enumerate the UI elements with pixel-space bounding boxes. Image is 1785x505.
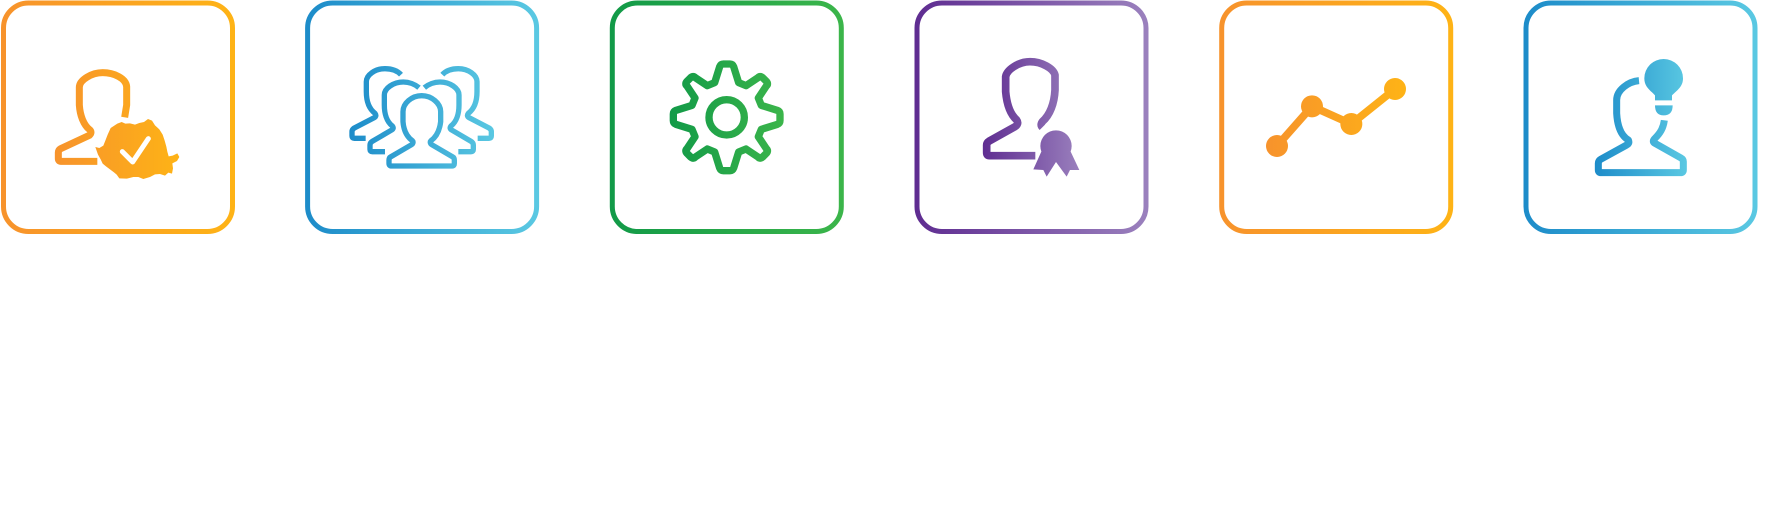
panel: certified person bbox=[917, 3, 1146, 232]
frame: purple rounded square bbox=[917, 3, 1146, 232]
frame: orange rounded square bbox=[4, 3, 232, 232]
middle right person bbox=[424, 82, 473, 152]
panel: growth chart bbox=[1222, 3, 1451, 232]
award ribbon tails bbox=[1033, 152, 1079, 177]
person outline bbox=[987, 62, 1055, 156]
chart line bbox=[1277, 89, 1395, 146]
icon: gear bbox=[673, 64, 780, 171]
light bulb glass bbox=[1644, 59, 1683, 100]
icon: group of five people bbox=[352, 69, 491, 166]
panel: settings bbox=[612, 3, 841, 232]
light bulb base bbox=[1655, 105, 1673, 115]
gear teeth outline bbox=[673, 64, 780, 171]
back left person bbox=[352, 69, 401, 138]
gear hub ring bbox=[709, 100, 744, 135]
Romania map shape bbox=[95, 119, 179, 179]
frame: orange rounded square bbox=[1222, 3, 1451, 232]
panel: idea bbox=[1526, 3, 1755, 232]
check mark bbox=[122, 139, 148, 162]
back right person bbox=[442, 69, 491, 138]
icon: person with light bulb bbox=[1598, 59, 1683, 173]
frame: green rounded square bbox=[612, 3, 841, 232]
person outline bbox=[58, 73, 127, 161]
frame: blue rounded square bbox=[1526, 3, 1755, 232]
panel: citizen verified bbox=[4, 3, 232, 232]
frame: blue rounded square bbox=[308, 3, 537, 232]
icon: person with Romania map and check mark bbox=[58, 73, 179, 179]
icon: line chart with four points bbox=[1266, 78, 1406, 157]
panel: group of people bbox=[308, 3, 537, 232]
chart points bbox=[1266, 78, 1406, 157]
front person bbox=[389, 96, 454, 166]
middle left person bbox=[370, 82, 419, 152]
award medal bbox=[1040, 130, 1072, 162]
person outline bbox=[1598, 81, 1683, 173]
icon: person with award ribbon bbox=[987, 62, 1079, 177]
